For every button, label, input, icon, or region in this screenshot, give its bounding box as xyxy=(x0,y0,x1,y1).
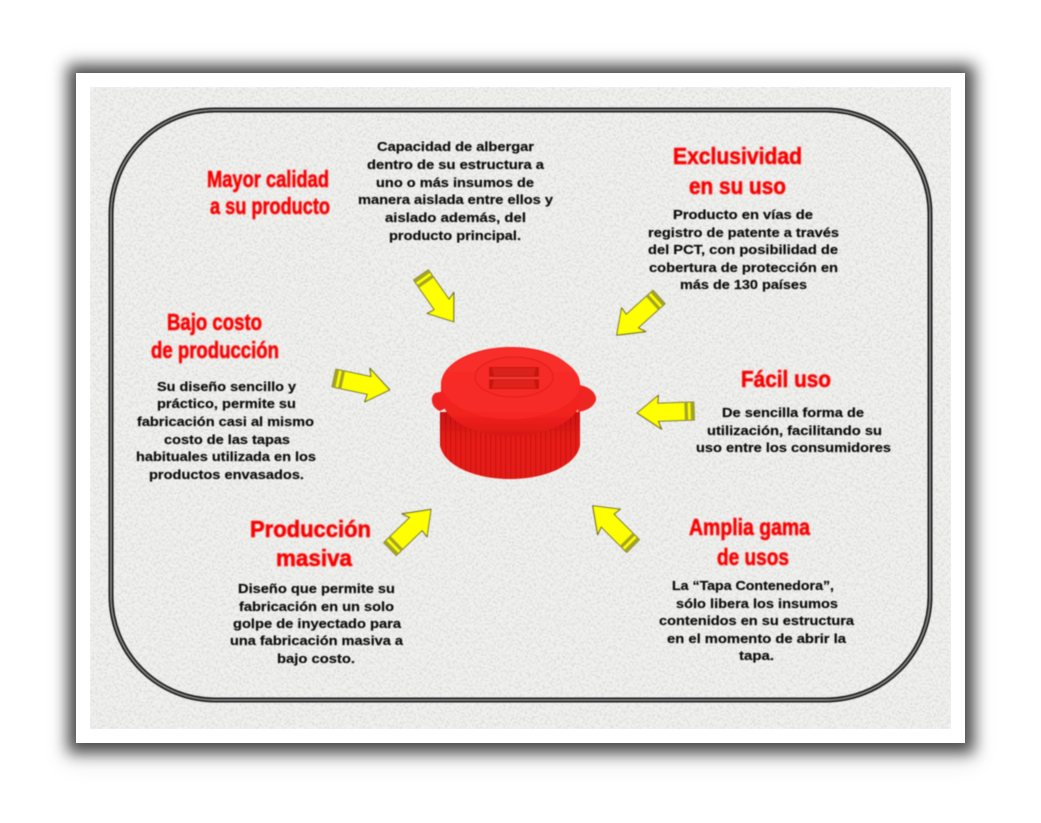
text: patente: cobertura de protección en xyxy=(649,261,838,275)
text: sencilla forma xyxy=(696,406,891,455)
heading: Exclusividad: en su uso xyxy=(689,173,786,199)
text: capacidad: uno o más insumos de xyxy=(376,176,534,190)
text: un solo golpe xyxy=(230,582,404,666)
text: un solo golpe: una fabricación masiva a xyxy=(230,634,404,648)
text: patente: del PCT, con posibilidad de xyxy=(648,243,838,257)
icon: red container cap xyxy=(432,347,596,479)
text: capacidad: Capacidad de albergar xyxy=(377,140,534,154)
heading: Producción masiva xyxy=(250,516,371,571)
rounded double border xyxy=(111,110,930,700)
text: diseño sencillo: habituales utilizada en los xyxy=(136,450,316,464)
white frame xyxy=(76,73,965,743)
text: sencilla forma: uso entre los consumidores xyxy=(696,441,891,455)
heading: Producción masiva: Producción xyxy=(250,516,371,542)
text: patente xyxy=(648,208,839,292)
text: capacidad: producto principal. xyxy=(389,229,521,243)
heading: Mayor calidad: Mayor calidad xyxy=(207,166,329,192)
text: diseño sencillo: fabricación casi al mismo xyxy=(137,415,314,429)
arrow: left xyxy=(330,361,393,406)
heading: Amplia gama: Amplia gama xyxy=(689,514,810,540)
text: patente: registro de patente a través xyxy=(648,226,839,240)
text: tapa contenedora: tapa. xyxy=(739,649,774,663)
heading: Exclusividad: Exclusividad xyxy=(673,143,802,169)
arrow: top right xyxy=(605,284,670,348)
text: sencilla forma: De sencilla forma de xyxy=(722,406,864,420)
arrow: right xyxy=(636,394,695,430)
text: tapa contenedora: en el momento de abrir la xyxy=(667,632,847,646)
text: diseño sencillo: productos envasados. xyxy=(149,468,304,482)
text: diseño sencillo xyxy=(136,380,316,482)
text: un solo golpe: fabricación en un solo xyxy=(239,600,394,614)
text: patente: Producto en vías de xyxy=(673,208,813,222)
heading: Mayor calidad xyxy=(207,166,330,219)
page shadow xyxy=(64,62,977,764)
textured panel xyxy=(90,87,951,729)
text: capacidad: dentro de su estructura a xyxy=(367,158,545,172)
text: tapa contenedora xyxy=(659,579,855,663)
text: un solo golpe: bajo costo. xyxy=(277,652,355,666)
text: capacidad: manera aislada entre ellos y xyxy=(358,193,553,207)
text: tapa contenedora: contenidos en su estructura xyxy=(659,614,855,628)
text: tapa contenedora: sólo libera los insumos xyxy=(676,597,838,611)
arrow: bottom left xyxy=(378,497,443,561)
text: sencilla forma: utilización, facilitando su xyxy=(707,424,882,438)
text: tapa contenedora: La “Tapa Contenedora”, xyxy=(672,579,834,593)
text: capacidad: aislado además, del xyxy=(385,211,526,225)
heading: Bajo costo: de producción xyxy=(151,337,279,363)
heading: Producción masiva: masiva xyxy=(276,545,352,571)
heading: Bajo costo: Bajo costo xyxy=(167,309,262,335)
heading: Exclusividad xyxy=(673,143,802,199)
arrow: top xyxy=(407,265,468,331)
text: capacidad xyxy=(358,140,553,243)
heading: Amplia gama: de usos xyxy=(717,544,789,570)
heading: Amplia gama xyxy=(689,514,810,570)
heading: Fácil uso: Fácil uso xyxy=(741,366,831,392)
text: un solo golpe: golpe de inyectado para xyxy=(233,617,402,631)
heading: Mayor calidad: a su producto xyxy=(210,193,330,219)
heading: Bajo costo xyxy=(151,309,279,363)
text: diseño sencillo: práctico, permite su xyxy=(157,397,296,411)
arrow: bottom right xyxy=(581,494,645,558)
text: patente: más de 130 países xyxy=(680,278,807,292)
text: diseño sencillo: costo de las tapas xyxy=(164,433,290,447)
text: diseño sencillo: Su diseño sencillo y xyxy=(157,380,296,394)
text: un solo golpe: Diseño que permite su xyxy=(238,582,395,596)
